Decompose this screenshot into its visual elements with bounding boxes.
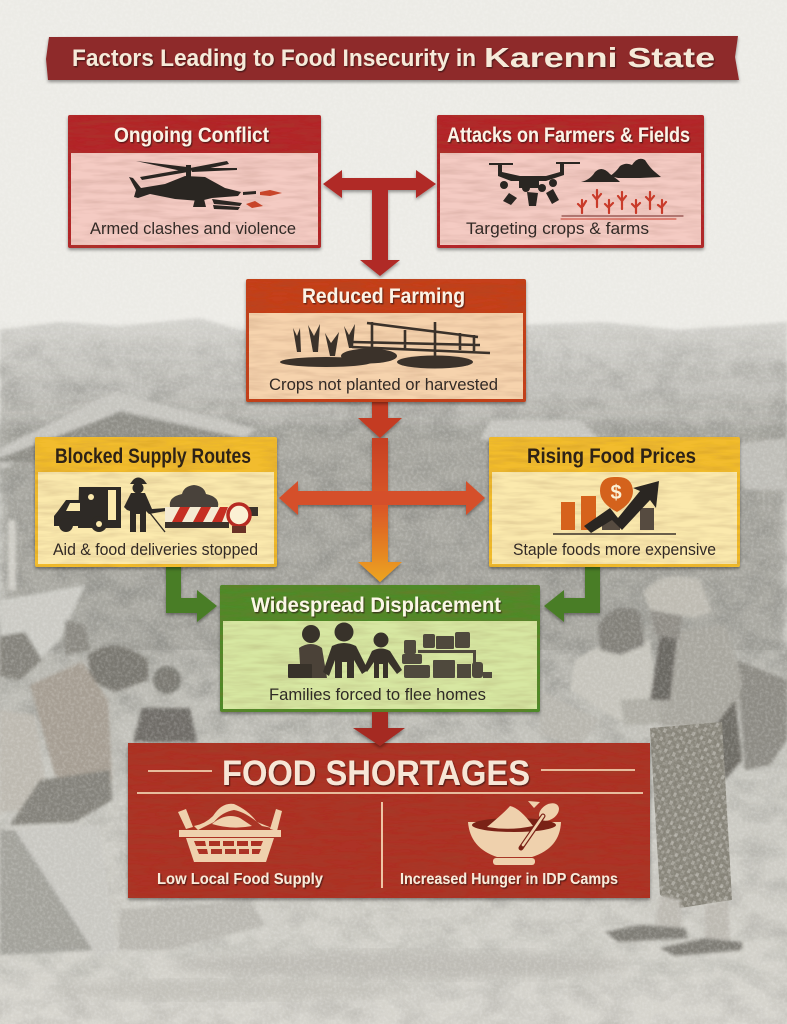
icon: supply truck [54, 487, 121, 532]
icon: drone dropping munitions [489, 162, 580, 206]
icon: price chart with dollar coin and rising arrow [553, 477, 676, 534]
heading: Attacks on Farmers and Fields: Attacks on Farmers & Fields [447, 124, 690, 147]
panel: Ongoing Conflict [68, 115, 321, 248]
panel: Attacks on Farmers and Fields [437, 115, 704, 248]
icon: fleeing family with belongings [288, 622, 492, 678]
arrow: reduced farming downward [358, 400, 402, 438]
panel: Widespread Displacement [220, 585, 540, 712]
icon: abandoned fields with broken fence [280, 322, 490, 368]
icon: price chart with dollar coin and rising arrow: $ [610, 482, 622, 504]
heading: Food Shortages: FOOD SHORTAGES [222, 754, 530, 793]
description: Staple foods more expensive: Staple foods more expensive [513, 540, 716, 559]
icon: smoke clouds [581, 159, 661, 182]
label: Low Local Food Supply: Low Local Food Supply [157, 871, 323, 888]
description: Aid and food deliveries stopped: Aid & food deliveries stopped [53, 540, 258, 559]
title text [72, 42, 715, 73]
icon: road barrier and sandbags [165, 485, 258, 533]
arrow: rising prices to displacement [544, 565, 600, 622]
heading: Rising Food Prices: Rising Food Prices [527, 445, 696, 468]
label: Increased Hunger in IDP Camps: Increased Hunger in IDP Camps [400, 871, 618, 888]
heading: Reduced Farming: Reduced Farming [302, 285, 465, 308]
panel: Reduced Farming [246, 279, 526, 402]
title text: Karenni State [484, 42, 715, 73]
arrow: blocked routes to displacement [166, 565, 217, 622]
panel: Food Shortages [128, 743, 650, 898]
description: Armed clashes and violence: Armed clashes and violence [90, 219, 296, 238]
arrow: T connector from top boxes to reduced farming [323, 170, 436, 276]
description: Targeting crops and farms: Targeting crops & farms [466, 219, 649, 238]
arrow: four-way connector to supply routes, food prices and displacement [279, 438, 485, 582]
heading: Widespread Displacement: Widespread Displacement [251, 594, 501, 617]
title banner [46, 36, 739, 80]
icon: armed soldier blocking road [124, 478, 166, 532]
panel: Blocked Supply Routes [35, 437, 277, 567]
title text: Factors Leading to Food Insecurity in [72, 45, 476, 72]
heading: Blocked Supply Routes: Blocked Supply Routes [55, 445, 251, 468]
description: Crops not planted or harvested: Crops not planted or harvested [269, 375, 498, 394]
photo detail: woman's patterned skirt [650, 722, 732, 908]
panel: Rising Food Prices [489, 437, 740, 567]
icon: burning crops [561, 190, 683, 219]
icon: attack helicopter firing rockets [129, 161, 282, 210]
icon: nearly empty basket [178, 804, 282, 862]
heading: Ongoing Conflict: Ongoing Conflict [114, 124, 269, 147]
arrow: displacement to food shortages [353, 712, 405, 746]
background: paper and faded camp photograph [0, 318, 787, 1024]
icon: bowl with spoon and grain [468, 800, 562, 865]
description: Families forced to flee homes: Families forced to flee homes [269, 685, 486, 704]
